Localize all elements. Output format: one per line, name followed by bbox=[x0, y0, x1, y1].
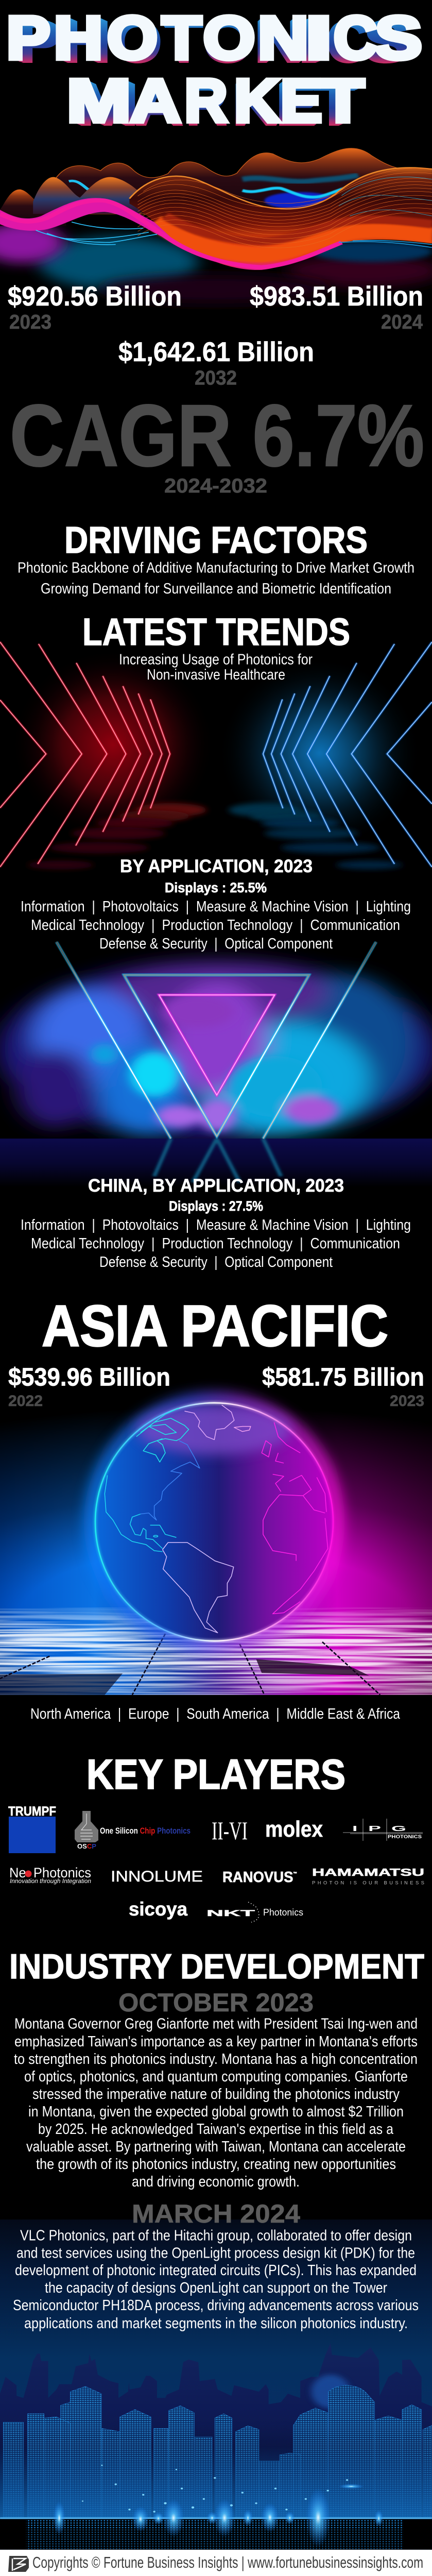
logo: one silicon chip photonics bbox=[75, 1811, 191, 1850]
latest trends: Non-invasive Healthcare bbox=[147, 667, 285, 683]
latest trends bbox=[82, 611, 350, 683]
logo: ipg photonics bbox=[343, 1819, 423, 1841]
neon chevrons background bbox=[0, 642, 432, 870]
stat: 2023 market size bbox=[8, 281, 182, 333]
logo: trumpf: TRUMPF bbox=[8, 1804, 56, 1819]
stat: asia pacific 2022: $539.96 Billion bbox=[8, 1364, 170, 1392]
footer bbox=[0, 2550, 432, 2576]
logo: hamamatsu: PHOTON IS OUR BUSINESS bbox=[312, 1880, 424, 1886]
title: T bbox=[162, 4, 202, 72]
logo: trumpf bbox=[8, 1804, 56, 1853]
march 2024 development bbox=[13, 2199, 419, 2332]
logo: sicoya: sicoya bbox=[129, 1899, 187, 1920]
logo: neophotonics: Innovation through Integration bbox=[10, 1877, 91, 1885]
stat: 2023 market size: 2023 bbox=[9, 311, 51, 333]
logo: ranovus: RANOVUS bbox=[222, 1869, 297, 1886]
logo: hamamatsu: HAMAMATSU bbox=[312, 1867, 424, 1878]
stat: 2032 market size: $1,642.61 Billion bbox=[118, 337, 314, 367]
stat: 2024 market size bbox=[250, 281, 423, 333]
CAGR: 2024-2032 bbox=[164, 475, 267, 497]
by application: Defense & Security | Optical Component bbox=[99, 936, 333, 952]
logo: hamamatsu bbox=[312, 1867, 424, 1886]
march 2024 development: the capacity of designs OpenLight can support on the Tower bbox=[45, 2280, 387, 2296]
title: P bbox=[6, 4, 50, 72]
logo: ranovus: ™ bbox=[293, 1871, 297, 1876]
stat: asia pacific 2022 bbox=[8, 1364, 170, 1410]
stat: 2032 market size: 2032 bbox=[195, 367, 237, 389]
china by application: Defense & Security | Optical Component bbox=[99, 1254, 333, 1270]
logo: II-VI: II-VI bbox=[212, 1816, 248, 1845]
title: K bbox=[234, 67, 280, 134]
title: T bbox=[322, 67, 364, 134]
stat: 2032 market size bbox=[118, 337, 314, 389]
latest trends: Increasing Usage of Photonics for bbox=[119, 651, 313, 668]
title: S bbox=[375, 4, 422, 72]
globe bbox=[93, 1400, 336, 1643]
stat: asia pacific 2022: 2022 bbox=[8, 1393, 43, 1410]
title: M bbox=[67, 67, 131, 134]
logo: neophotonics: Ne Photonics bbox=[9, 1865, 91, 1880]
china by application: Displays : 27.5% bbox=[169, 1198, 263, 1214]
logo: nkt photonics: NKT bbox=[206, 1908, 256, 1918]
stat: 2024 market size: 2024 bbox=[381, 311, 423, 333]
by application: BY APPLICATION, 2023 bbox=[120, 856, 313, 876]
title: A bbox=[130, 67, 181, 134]
logo: ipg photonics: PHOTONICS bbox=[388, 1834, 422, 1840]
march 2024 development: MARCH 2024 bbox=[132, 2199, 300, 2228]
title: I bbox=[305, 4, 332, 72]
key players heading: KEY PLAYERS bbox=[87, 1751, 345, 1798]
title: O bbox=[107, 4, 158, 72]
logo: one silicon chip photonics: OSCP bbox=[77, 1842, 96, 1850]
title: O bbox=[203, 4, 255, 72]
latest trends: LATEST TRENDS bbox=[82, 611, 350, 653]
title: R bbox=[184, 67, 228, 134]
title bbox=[0, 0, 432, 134]
china by application bbox=[21, 1176, 411, 1270]
driving factors: DRIVING FACTORS bbox=[64, 520, 368, 561]
logo: one silicon chip photonics: One Silicon Chip Photonics bbox=[100, 1826, 191, 1836]
logo: innolume: INNOLUME bbox=[111, 1868, 203, 1885]
by application: Displays : 25.5% bbox=[165, 880, 267, 895]
stat: asia pacific 2023 bbox=[262, 1364, 424, 1410]
wave art bbox=[0, 148, 432, 303]
logo: ipg photonics: I P G bbox=[352, 1824, 406, 1833]
by application bbox=[21, 856, 411, 952]
october 2023 development: OCTOBER 2023 bbox=[118, 1988, 314, 2017]
asia pacific heading: ASIA PACIFIC bbox=[42, 1293, 388, 1358]
driving factors bbox=[18, 520, 414, 597]
china by application: CHINA, BY APPLICATION, 2023 bbox=[88, 1176, 344, 1196]
stat: asia pacific 2023: 2023 bbox=[390, 1393, 424, 1410]
title: N bbox=[258, 4, 308, 72]
title: E bbox=[280, 67, 322, 134]
october 2023 development: and driving economic growth. bbox=[132, 2174, 300, 2190]
logo: nkt photonics: Photonics bbox=[263, 1907, 303, 1918]
logo: nkt photonics bbox=[206, 1902, 303, 1922]
title: H bbox=[54, 4, 103, 72]
globe background bbox=[0, 1417, 432, 1695]
logo: molex: molex bbox=[265, 1817, 323, 1842]
october 2023 development bbox=[14, 1988, 418, 2190]
title: C bbox=[334, 4, 377, 72]
city skyline background bbox=[0, 2219, 432, 2550]
neon triangles background bbox=[0, 942, 432, 1188]
stat: 2023 market size: $920.56 Billion bbox=[8, 281, 182, 312]
